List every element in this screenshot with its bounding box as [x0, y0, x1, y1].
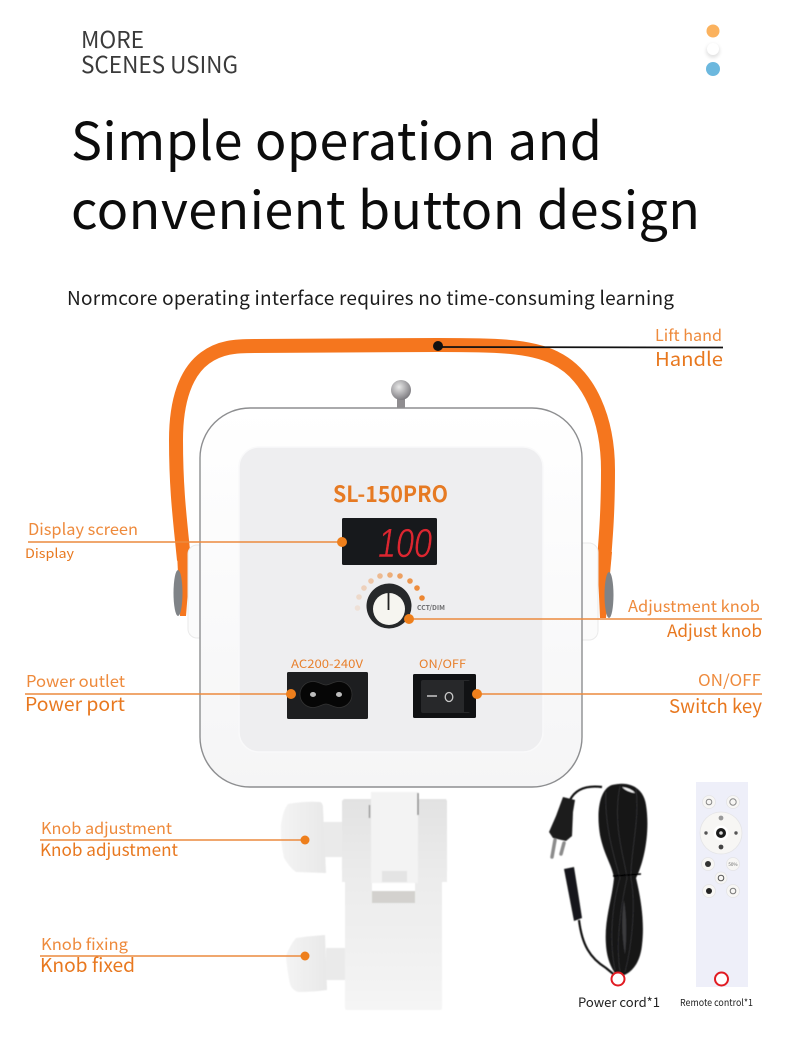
callout: display screen — [25, 516, 347, 562]
title: Simple operation and — [71, 100, 602, 175]
LED display: 100 — [378, 520, 432, 566]
callout: power outlet: Power outlet — [26, 668, 125, 692]
callout: adjustment knob: Adjust knob — [667, 617, 762, 642]
connector — [564, 867, 617, 977]
callout: display screen: Display — [25, 543, 74, 562]
product: light unit — [174, 345, 614, 787]
product: mounting bracket — [281, 792, 447, 1010]
centre arm — [370, 792, 418, 903]
dial dots — [355, 572, 425, 611]
label: remote control: Remote control*1 — [680, 995, 753, 1009]
callout: on/off switch: Switch key — [669, 692, 762, 719]
LED display — [342, 518, 437, 566]
callout: handle: Handle — [655, 345, 723, 372]
inner panel — [239, 447, 543, 752]
plug — [549, 787, 602, 857]
accessory: power cord — [549, 784, 647, 977]
handle — [176, 345, 612, 618]
callout: on/off switch — [472, 667, 762, 719]
callout: knob fixing — [40, 931, 310, 978]
accessory: remote control — [696, 782, 748, 987]
callout: knob adjustment: Knob adjustment — [40, 836, 179, 861]
callout: adjustment knob: Adjustment knob — [628, 593, 760, 617]
callout: power outlet — [25, 668, 296, 717]
CCT/DIM label: CCT/DIM — [417, 602, 445, 612]
callout: handle: Lift hand — [655, 322, 722, 346]
brand tag: more scenes using — [81, 21, 238, 80]
callout: knob adjustment — [40, 815, 310, 861]
callout: display screen: Display screen — [28, 516, 138, 540]
rocker switch — [413, 674, 476, 718]
callout: on/off switch: ON/OFF — [698, 667, 761, 691]
remote buttons — [700, 796, 742, 898]
on/off label: ON/OFF — [419, 656, 467, 672]
title — [71, 100, 700, 244]
CCT/DIM knob — [366, 584, 412, 628]
label: power cord: Power cord*1 — [578, 992, 660, 1011]
callout: handle — [433, 322, 723, 372]
brand tag: more scenes using: SCENES USING — [81, 46, 238, 80]
right side mount — [574, 543, 614, 640]
callout: knob fixing: Knob fixing — [41, 931, 128, 955]
coiled cable — [598, 784, 647, 977]
decorative colour dots — [706, 24, 720, 76]
left side mount — [174, 545, 212, 638]
brand tag: more scenes using: MORE — [81, 21, 144, 55]
callout: knob adjustment: Knob adjustment — [41, 815, 172, 839]
upper knob — [281, 802, 343, 873]
callout: power outlet: Power port — [25, 690, 125, 717]
model name: SL-150PRO — [333, 477, 448, 509]
lower knob — [286, 935, 346, 992]
subtitle: Normcore operating interface requires no time-consuming learning — [67, 284, 674, 311]
bracket body — [342, 799, 447, 1010]
lamp body — [200, 408, 582, 787]
callout: knob fixing: Knob fixed — [40, 951, 135, 978]
power socket — [287, 672, 368, 719]
voltage label: AC200-240V — [291, 656, 363, 672]
remote buttons: 50% — [728, 862, 738, 868]
title: convenient button design — [71, 169, 700, 244]
callout: adjustment knob — [404, 593, 762, 642]
marker: power cord ring — [612, 972, 624, 986]
ball mount — [391, 380, 411, 409]
marker: remote ring — [715, 972, 728, 986]
